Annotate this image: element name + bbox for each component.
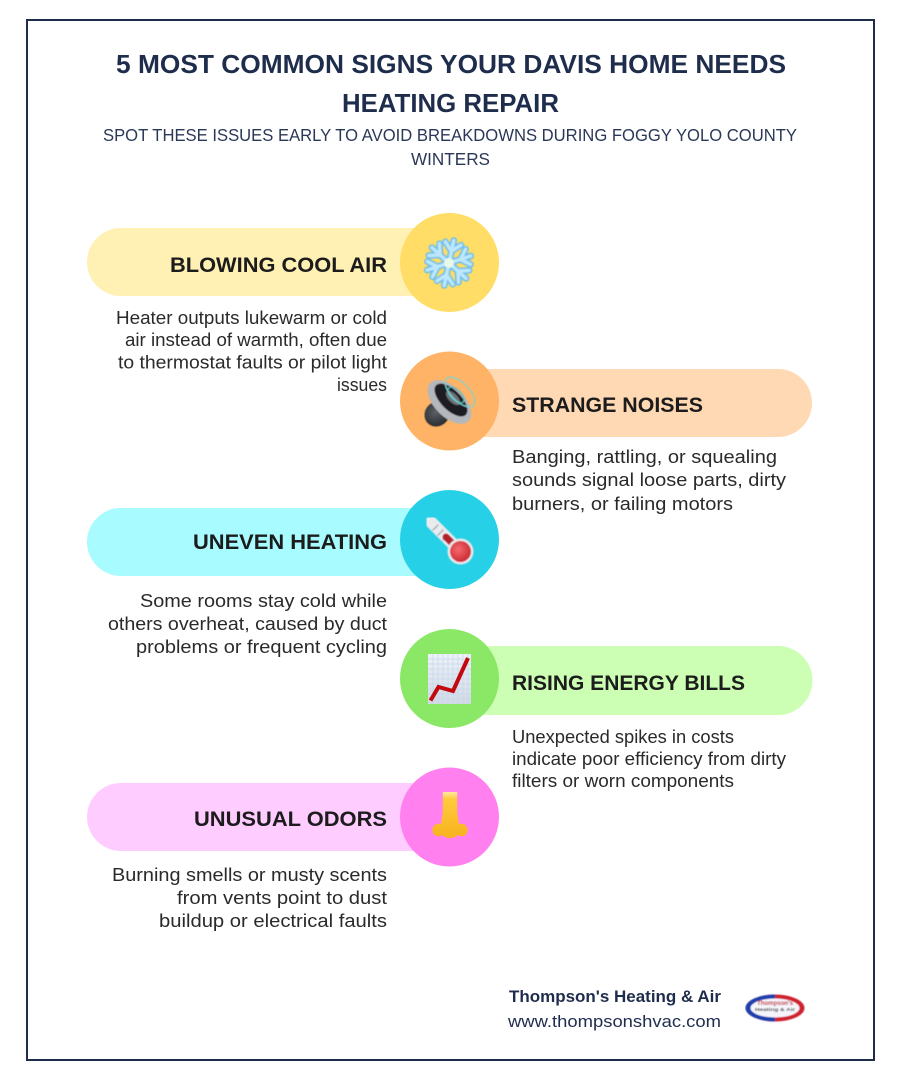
panel: blowing cool air [87,213,499,395]
text: uneven heating: Some rooms stay cold while [140,591,387,611]
text: rising energy bills: indicate poor efficiency from dirty [512,749,786,769]
logo: Thompson's [757,1000,793,1007]
title: HEATING REPAIR [342,88,559,118]
text: strange noises: Banging, rattling, or squealing [512,447,777,467]
text: rising energy bills: Unexpected spikes in costs [512,727,734,747]
pill: unusual odors [87,783,440,851]
footer: company name: Thompson's Heating & Air [509,987,721,1006]
text: unusual odors [112,865,387,931]
logo [746,994,804,1022]
heading: blowing cool air: BLOWING COOL AIR [170,254,387,277]
icon: speaker [419,372,480,432]
text: rising energy bills: filters or worn components [512,771,734,791]
text: blowing cool air: to thermostat faults or pilot light [118,352,387,372]
circle: rising energy bills [400,629,499,728]
subtitle: WINTERS [411,149,490,169]
text: blowing cool air [116,308,387,395]
subtitle: SPOT THESE ISSUES EARLY TO AVOID BREAKDOWNS DURING FOGGY YOLO COUNTY [103,125,797,145]
panel: strange noises [400,352,812,514]
text: unusual odors: buildup or electrical faults [159,911,387,931]
pill: rising energy bills [460,646,813,715]
text: blowing cool air: issues [337,375,387,395]
text: strange noises: burners, or failing motors [512,494,733,514]
icon: snowflake [421,236,477,290]
text: strange noises [512,447,786,514]
icon: thermometer [431,522,474,564]
text: rising energy bills [512,727,786,791]
title: 5 MOST COMMON SIGNS YOUR DAVIS HOME NEEDS [116,49,786,79]
footer: website: www.thompsonshvac.com [507,1013,721,1031]
circle: uneven heating [400,490,499,589]
pill: strange noises [460,369,812,437]
text: uneven heating [108,591,387,657]
logo: Heating & Air [755,1007,795,1012]
text: uneven heating: others overheat, caused by duct [108,614,387,634]
heading: rising energy bills: RISING ENERGY BILLS [512,672,745,695]
subtitle [103,125,797,169]
panel: unusual odors [87,768,499,931]
heading: unusual odors: UNUSUAL ODORS [194,808,387,831]
text: blowing cool air: air instead of warmth, often due [125,330,387,350]
text: strange noises: sounds signal loose parts, dirty [512,470,786,490]
circle: unusual odors [400,768,499,866]
heading: uneven heating: UNEVEN HEATING [193,531,387,554]
circle: blowing cool air [400,213,499,312]
text: uneven heating: problems or frequent cycling [136,637,387,657]
text: unusual odors: from vents point to dust [177,888,387,908]
pill: uneven heating [87,508,440,576]
panel: uneven heating [87,490,499,657]
icon: chart [428,654,471,704]
pill: blowing cool air [87,228,440,296]
text: blowing cool air: Heater outputs lukewarm or cold [116,308,387,328]
panel: rising energy bills [400,629,813,791]
icon: nose [432,792,468,838]
text: unusual odors: Burning smells or musty scents [112,865,387,885]
title [116,49,786,118]
circle: strange noises [400,352,499,450]
heading: strange noises: STRANGE NOISES [512,394,703,417]
